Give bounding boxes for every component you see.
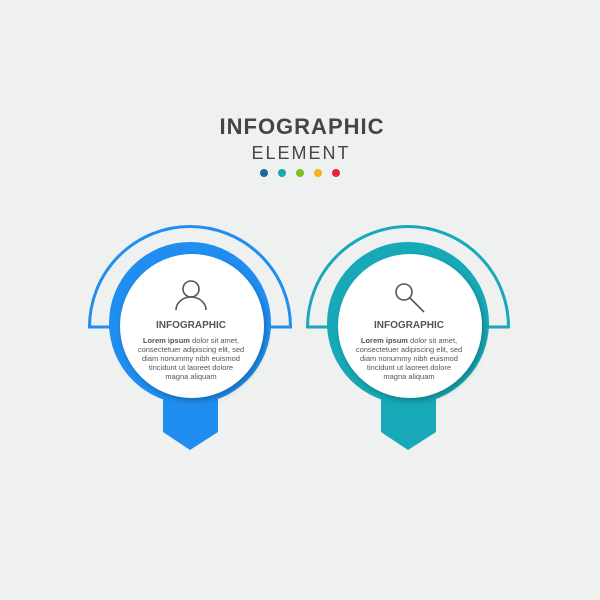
text block: magna aliquam bbox=[383, 372, 435, 381]
text block: tincidunt ut laoreet dolore bbox=[367, 363, 451, 372]
title: INFOGRAPHIC bbox=[220, 114, 384, 139]
panel: left unit bbox=[88, 226, 292, 450]
text block: INFOGRAPHIC bbox=[374, 320, 444, 331]
text block: Lorem ipsum dolor sit amet, bbox=[361, 336, 457, 345]
colour dots bbox=[260, 169, 340, 177]
text block: magna aliquam bbox=[165, 372, 217, 381]
text block: diam nonummy nibh euismod bbox=[142, 354, 240, 363]
title bbox=[220, 114, 384, 163]
pointer tab bbox=[163, 395, 218, 450]
text block bbox=[356, 320, 462, 381]
text block: tincidunt ut laoreet dolore bbox=[149, 363, 233, 372]
icon: person bbox=[176, 281, 206, 310]
pointer tab bbox=[381, 395, 436, 450]
arch outline bbox=[306, 226, 510, 327]
title: ELEMENT bbox=[251, 143, 351, 163]
text block: Lorem ipsum dolor sit amet, bbox=[143, 336, 239, 345]
text block: consectetuer adipiscing elit, sed bbox=[138, 345, 244, 354]
text block: INFOGRAPHIC bbox=[156, 320, 226, 331]
panel: right unit bbox=[306, 226, 510, 450]
text block: consectetuer adipiscing elit, sed bbox=[356, 345, 462, 354]
text block: diam nonummy nibh euismod bbox=[360, 354, 458, 363]
text block bbox=[138, 320, 244, 381]
arch outline bbox=[88, 226, 292, 327]
icon: magnifier bbox=[396, 284, 424, 312]
